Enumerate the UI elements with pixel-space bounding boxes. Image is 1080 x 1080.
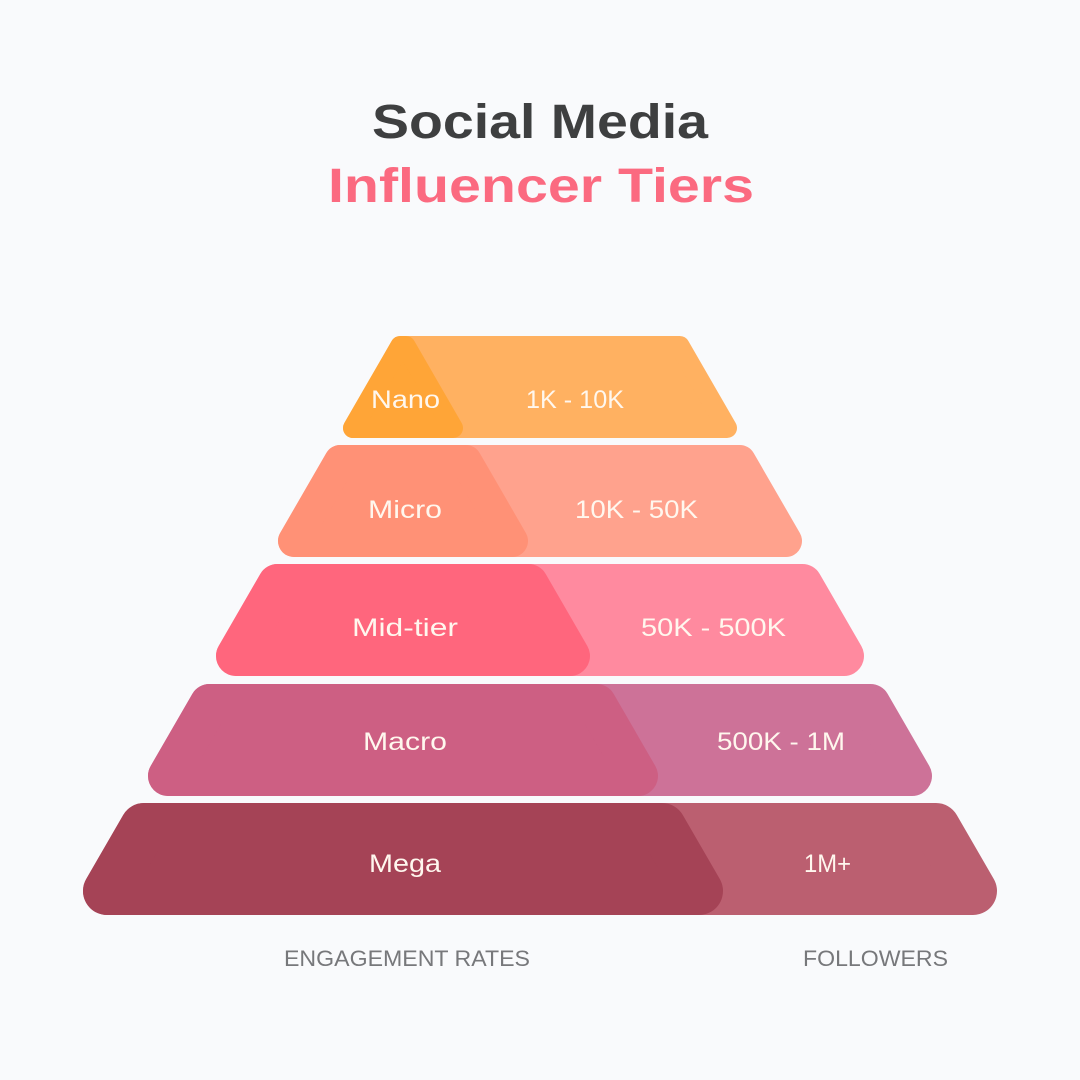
engagement band: Macro bbox=[168, 704, 638, 776]
followers band: Macro bbox=[168, 704, 912, 776]
tier: Mid-tier bbox=[236, 584, 844, 656]
followers band: Mega bbox=[107, 827, 973, 891]
label: Micro: Micro bbox=[368, 496, 442, 524]
tier: Mega bbox=[107, 827, 973, 891]
label: Mega: Mega bbox=[369, 850, 441, 878]
label: Macro: Macro bbox=[363, 728, 447, 756]
tier: Macro bbox=[168, 704, 912, 776]
engagement band: Micro bbox=[294, 461, 512, 541]
engagement band: Mega bbox=[107, 827, 699, 891]
label: Mid-tier: Mid-tier bbox=[352, 614, 458, 642]
value: 50K - 500K: 50K - 500K bbox=[641, 614, 786, 642]
engagement band: Nano bbox=[353, 346, 453, 428]
tier: Nano bbox=[353, 346, 727, 428]
label: Nano: Nano bbox=[371, 386, 440, 414]
engagement band: Mid-tier bbox=[236, 584, 570, 656]
value: 1M+: 1M+ bbox=[804, 850, 851, 878]
title line: Influencer Tiers: Influencer Tiers bbox=[328, 160, 754, 213]
followers band: Micro bbox=[294, 461, 786, 541]
followers band: Mid-tier bbox=[236, 584, 844, 656]
title bbox=[328, 96, 754, 213]
value: 10K - 50K: 10K - 50K bbox=[575, 496, 698, 524]
title line: Social Media: Social Media bbox=[372, 96, 708, 149]
pyramid chart bbox=[107, 346, 973, 891]
value: 1K - 10K: 1K - 10K bbox=[526, 386, 624, 414]
followers band: Nano bbox=[353, 346, 727, 428]
axis caption: engagement rates: ENGAGEMENT RATES bbox=[284, 946, 530, 971]
value: 500K - 1M: 500K - 1M bbox=[717, 728, 845, 756]
tier: Micro bbox=[294, 461, 786, 541]
axis caption: followers: FOLLOWERS bbox=[803, 946, 948, 971]
